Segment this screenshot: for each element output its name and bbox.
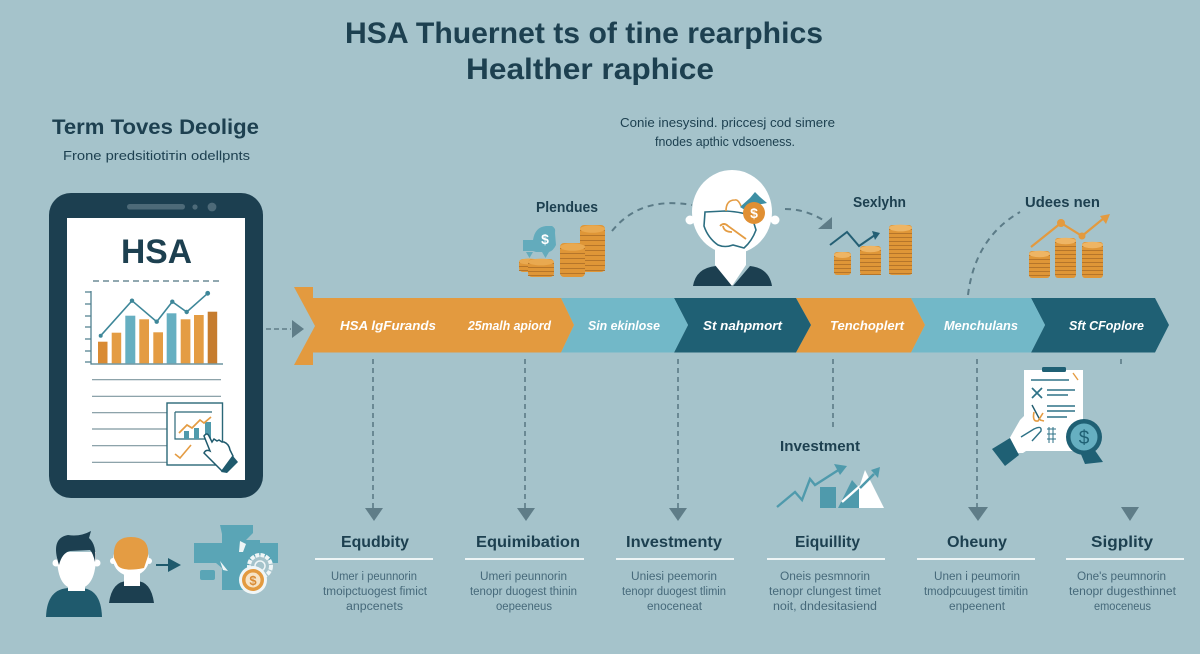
top caption	[620, 116, 835, 149]
icon: puzzle with gears and coin	[194, 525, 278, 594]
tablet heading HSA: HSA	[121, 233, 192, 271]
column: Investmenty: tenopr duogest tlimin	[622, 586, 726, 598]
panel: tablet with HSA report	[49, 193, 263, 498]
column: Equimibation: oepeeneus	[496, 601, 552, 613]
ribbon: six-step process arrow	[294, 287, 1169, 365]
column: Oheuny: Unen i peumorin	[934, 571, 1020, 583]
column: Equimibation: tenopr duogest thinin	[470, 586, 577, 598]
column: Oheuny: enpeenent	[949, 601, 1006, 613]
icon: puzzle with gears and coin: $	[249, 573, 257, 588]
icon: checklist with hand and dollar medal	[992, 367, 1103, 466]
icon: coin stacks with growth line: Sexlyhn	[853, 195, 906, 211]
column: Oheuny: tmodpcuugest timitin	[924, 586, 1028, 598]
ribbon segment 6 blue	[911, 298, 1045, 352]
arrow: dashed curve toward upper-right coins	[968, 212, 1020, 295]
ribbon labels: St nahpmort	[703, 318, 783, 333]
column: Equimibation: Equimibation	[476, 534, 580, 551]
icon: coins with piggy: Plendues	[536, 200, 598, 216]
column: Oheuny	[917, 534, 1035, 613]
tablet text lines	[92, 380, 221, 462]
left heading block: Frone predsitiotiтin odellpnts	[63, 149, 250, 163]
column: Equdbity	[315, 534, 433, 613]
left heading block: Term Toves Deolige	[52, 116, 259, 139]
icon: coin stacks with orange trend line	[1025, 195, 1110, 278]
person: man	[46, 531, 102, 617]
column: Eiquillity: Oneis pesmnorin	[780, 571, 870, 583]
arrow: people to puzzle	[156, 558, 181, 572]
column: Eiquillity: tenopr clungest timet	[769, 586, 882, 598]
icon: coins with piggy: $	[541, 231, 549, 247]
column: Sigplity	[1066, 534, 1184, 613]
column: Investmenty: enoceneat	[647, 601, 703, 613]
ribbon segment 1 orange with flag tail	[294, 287, 574, 365]
arrow: dashed curve from coins to head	[612, 203, 692, 231]
column: Sigplity: tenopr dugesthinnet	[1069, 586, 1177, 598]
ribbon labels: Sin ekinlose	[588, 318, 660, 333]
left heading block	[52, 116, 259, 163]
column: Sigplity: Sigplity	[1091, 534, 1153, 551]
icon: coin stacks with orange trend line: Udees nen	[1025, 195, 1100, 211]
ribbon segment 3 blue	[561, 298, 688, 352]
column: Oheuny: Oheuny	[947, 534, 1007, 551]
ribbon labels	[340, 318, 1144, 333]
column: Equdbity: Umer i peunnorin	[331, 571, 417, 583]
icon: coins with piggy	[519, 200, 605, 277]
column: Eiquillity	[767, 534, 885, 613]
person: woman	[109, 537, 154, 603]
icon: investment chart: Investment	[780, 439, 860, 455]
ribbon labels: Menchulans	[944, 318, 1018, 333]
top caption: fnodes apthic vdsoeness.	[655, 135, 795, 149]
icon: head with brain and dollar coin	[686, 170, 780, 286]
top caption: Conie inesysind. priccesj cod simere	[620, 116, 835, 130]
ribbon segment 4 dark	[674, 298, 811, 352]
ribbon segment 5 orange	[796, 298, 925, 352]
arrow: dashed curve from head to growth coins	[785, 209, 832, 229]
ribbon labels: 25malh apiord	[467, 318, 552, 333]
arrow: tablet to ribbon	[266, 320, 304, 338]
icon: head with brain and dollar coin: $	[750, 205, 758, 221]
ribbon segment 7 dark	[1031, 298, 1169, 352]
column: Eiquillity: Eiquillity	[795, 534, 860, 551]
icon: checklist with hand and dollar medal: $	[1079, 428, 1090, 449]
icon: coin stacks with growth line	[830, 195, 912, 275]
icon: two people with arrow to puzzle	[46, 525, 278, 617]
title: HSA Thuernet ts of tine rearphics	[345, 17, 823, 50]
column: Investmenty: Investmenty	[626, 534, 722, 551]
column: Sigplity: One's peumnorin	[1077, 571, 1166, 583]
column: Eiquillity: noit, dndesitasiend	[773, 601, 877, 613]
arrows: dashed connectors from ribbon to columns	[365, 359, 1139, 521]
column: Investmenty	[616, 534, 734, 613]
ribbon labels: Sft CFoplore	[1069, 318, 1144, 333]
icon: investment chart	[777, 439, 884, 508]
column: Equdbity: tmoipctuogest fimict	[323, 586, 428, 598]
column: Investmenty: Uniesi peemorin	[631, 571, 717, 583]
title: Healther raphice	[466, 53, 714, 86]
ribbon labels: Tenchoplert	[830, 318, 905, 333]
column: Equimibation: Umeri peunnorin	[480, 571, 567, 583]
column: Equdbity: anpcenets	[346, 601, 403, 613]
column: Equimibation	[465, 534, 584, 613]
title	[345, 17, 823, 86]
column: Equdbity: Equdbity	[341, 534, 409, 551]
inset chart with pointing hand	[167, 403, 238, 473]
ribbon labels: HSA lgFurands	[340, 318, 436, 333]
tablet bar and line chart	[85, 281, 223, 364]
column: Sigplity: emoceneus	[1094, 601, 1151, 613]
